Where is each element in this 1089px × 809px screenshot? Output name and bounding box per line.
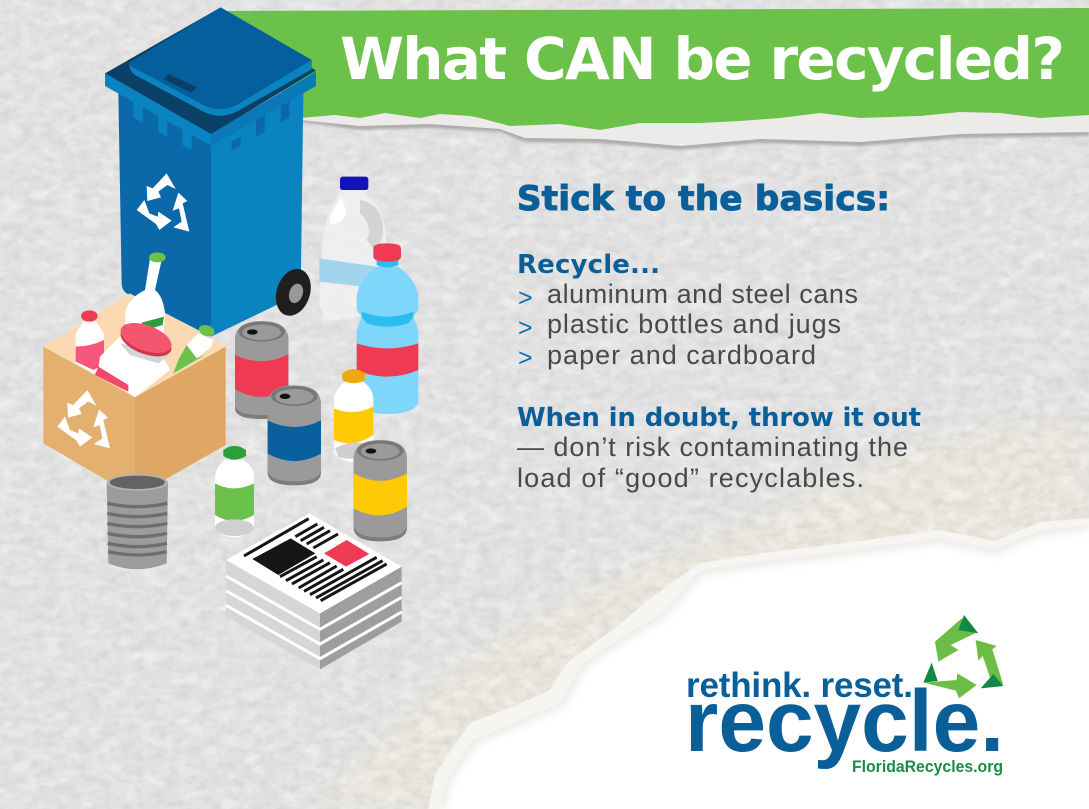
icon: newspaper stack (226, 513, 402, 669)
text block: recycle list: paper and cardboard (547, 340, 816, 370)
beige torn paper band (318, 420, 1089, 809)
icon: large white bottle with red cap (95, 317, 175, 397)
text block: recycle list: plastic bottles and jugs (547, 309, 841, 339)
text block: when in doubt (517, 403, 921, 493)
icon: red can (235, 321, 288, 419)
text block: recycle list: > (518, 344, 533, 372)
icon: recycle arrows on bin (137, 173, 189, 232)
logo: rethink reset recycle: recycle. (685, 673, 1004, 770)
icon: green bottle (173, 323, 216, 373)
icon: cardboard box with bottles (43, 252, 226, 497)
icon: wheel (270, 264, 317, 320)
logo: rethink reset recycle: FloridaRecycles.org (852, 757, 1003, 776)
white torn corner (428, 518, 1089, 809)
logo: rethink reset recycle (685, 615, 1004, 776)
text block: when in doubt: — don’t risk contaminating the (517, 432, 908, 462)
icon: milk jug (319, 177, 387, 320)
illustration: recyclables (43, 7, 418, 669)
text block: recycle list: Recycle... (517, 250, 660, 280)
text block: recycle list: aluminum and steel cans (547, 279, 858, 309)
text block: when in doubt: When in doubt, throw it out (517, 403, 921, 433)
logo: rethink reset recycle: rethink. reset. (686, 666, 913, 705)
icon: blue plastic bottle (357, 243, 418, 414)
heading: stick to the basics: Stick to the basics: (517, 179, 890, 219)
text block: recycle list (517, 250, 858, 372)
icon: small red bottle (76, 310, 104, 373)
green title banner (225, 8, 1089, 150)
icon: yellow can (354, 440, 407, 541)
icon: blue wheelie bin (105, 7, 316, 337)
icon: yellow bottle (334, 369, 373, 462)
icon: steel tin can (107, 474, 168, 569)
text block: recycle list: > (518, 284, 533, 312)
title: What CAN be recycled? (340, 25, 1065, 93)
icon: white glass bottle (125, 252, 166, 340)
icon: recycle arrows on box (57, 390, 110, 448)
text block: when in doubt: load of “good” recyclables. (517, 463, 864, 493)
icon: blue can (268, 385, 321, 485)
icon: green recycling arrows (923, 615, 1003, 698)
text block: recycle list: > (518, 314, 533, 342)
icon: green bottle on floor (215, 446, 254, 537)
